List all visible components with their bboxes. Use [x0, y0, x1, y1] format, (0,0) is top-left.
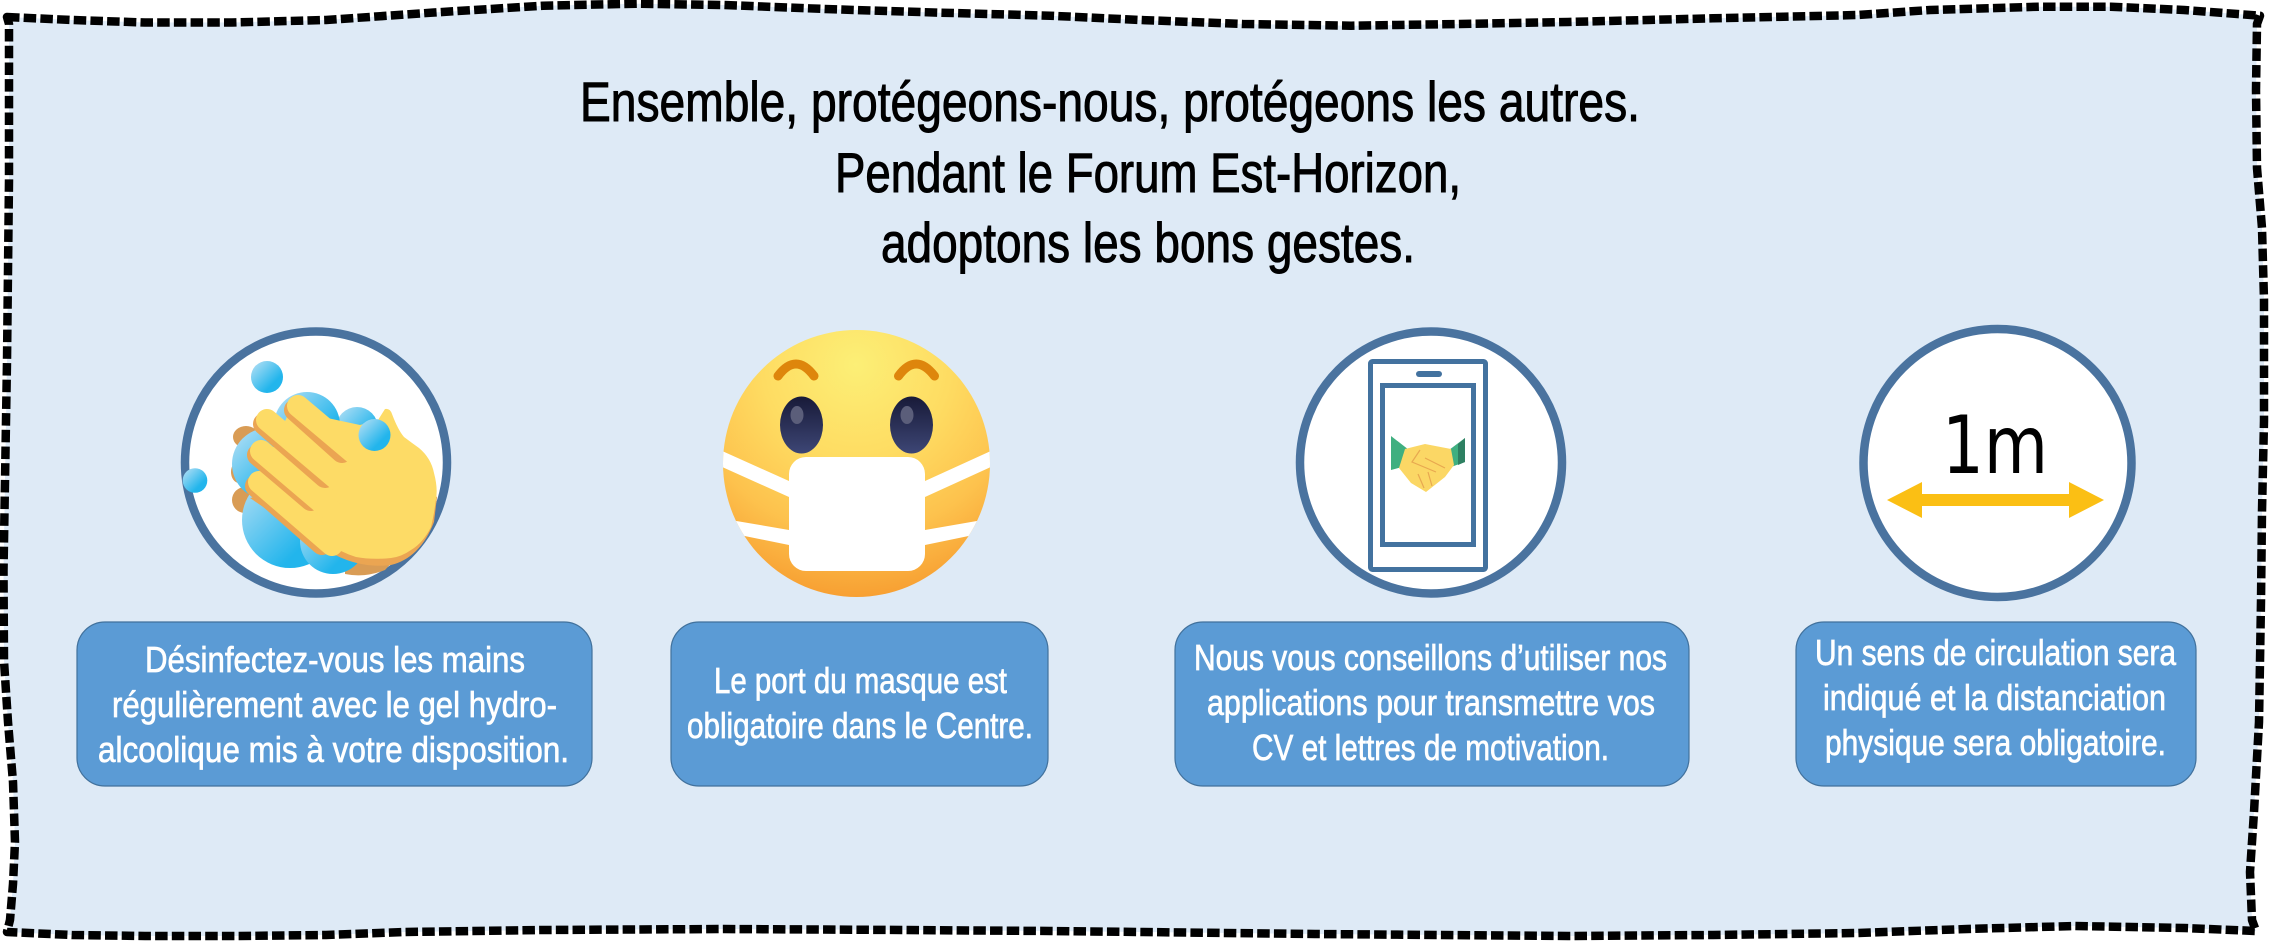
hand [250, 406, 437, 566]
caption: applications: Nous vous conseillons d’utiliser nos [1194, 637, 1667, 678]
caption: mask: obligatoire dans le Centre. [687, 705, 1033, 746]
caption: circulation [1796, 622, 2196, 786]
caption: mask [671, 622, 1048, 786]
caption: applications: CV et lettres de motivation. [1252, 727, 1609, 768]
icon: one metre distance: 1m [1942, 399, 2048, 492]
caption: circulation: indiqué et la distanciation [1823, 677, 2166, 718]
caption: circulation: Un sens de circulation sera [1815, 632, 2177, 673]
caption: hands: régulièrement avec le gel hydro- [112, 684, 557, 725]
title [580, 70, 1640, 274]
title: Pendant le Forum Est-Horizon, [835, 141, 1461, 204]
caption: applications: applications pour transmettre vos [1207, 682, 1655, 723]
caption: hands [77, 622, 592, 786]
caption: applications [1175, 622, 1689, 786]
arrow: double-headed [1887, 482, 2104, 518]
caption: hands: alcoolique mis à votre disposition. [98, 729, 569, 770]
title: adoptons les bons gestes. [881, 211, 1415, 274]
icon: smartphone with handshake [1300, 332, 1562, 594]
caption: circulation: physique sera obligatoire. [1825, 722, 2166, 763]
caption: mask: Le port du masque est [714, 660, 1007, 701]
caption: hands: Désinfectez-vous les mains [145, 639, 525, 680]
icon: emoji with mask [720, 330, 993, 597]
icon: one metre distance [1864, 329, 2132, 597]
icon: washing hands [183, 332, 447, 594]
title: Ensemble, protégeons-nous, protégeons les autres. [580, 70, 1640, 133]
handshake [1391, 436, 1465, 492]
